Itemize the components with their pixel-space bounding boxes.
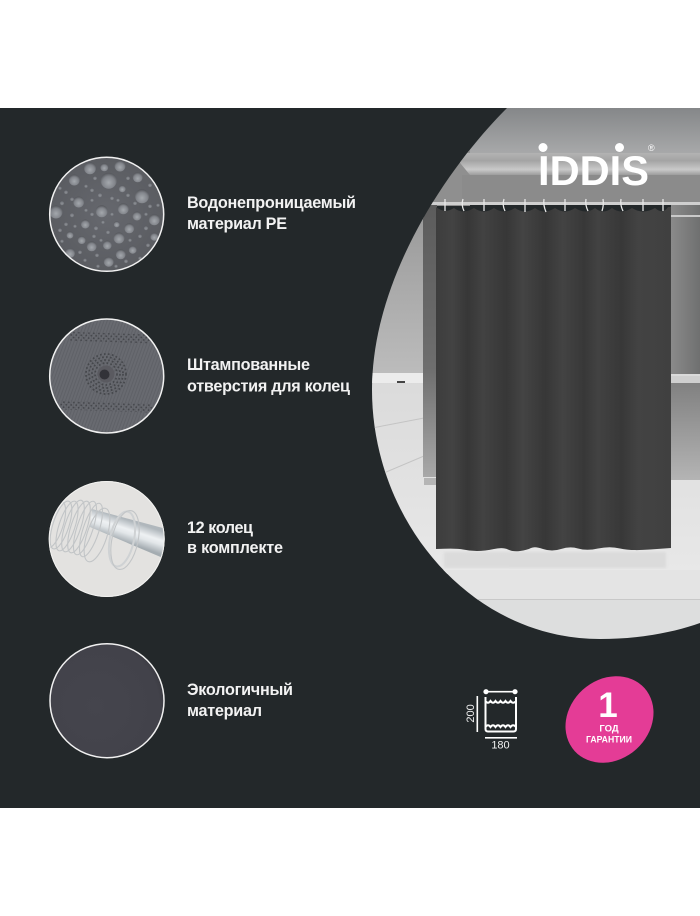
side wall by cornice — [430, 150, 470, 206]
lower tiled wall — [360, 374, 700, 574]
size icon 200 x 180 — [465, 689, 518, 752]
feature 1 label — [187, 194, 356, 233]
right rail — [671, 376, 700, 383]
warranty badge — [548, 658, 671, 781]
droplet circle outline — [50, 157, 164, 271]
rings circle outline — [49, 482, 164, 596]
feature 1: water droplets — [49, 157, 356, 273]
feature 1 label: материал PE — [187, 215, 287, 233]
width line — [485, 737, 517, 739]
height value: 200 — [465, 704, 477, 723]
feature 4 label: материал — [187, 702, 262, 720]
feature 1 label: Водонепроницаемый — [187, 194, 356, 212]
rod with finials — [483, 689, 518, 694]
droplet texture circle — [49, 157, 165, 273]
warranty number: 1 — [598, 686, 618, 725]
dark background panel — [0, 108, 700, 808]
warranty text — [586, 724, 632, 746]
hole circle outline — [50, 319, 164, 433]
bathroom photo with curtain — [360, 108, 700, 645]
right lower wall — [671, 382, 700, 480]
tile joints — [374, 418, 423, 473]
left wall — [372, 217, 424, 374]
floor — [478, 600, 700, 639]
left wainscot rail — [372, 373, 423, 383]
logo: ® — [648, 143, 655, 153]
skirting — [444, 570, 700, 600]
curtain rings — [445, 199, 663, 212]
wall handle — [397, 381, 405, 383]
ceiling — [466, 108, 700, 154]
feature 3 label: 12 колец — [187, 519, 253, 537]
shower rod — [426, 202, 700, 205]
rings on rod photo circle — [48, 481, 165, 597]
width value: 180 — [491, 740, 510, 752]
pink blob — [548, 658, 671, 781]
right wall — [671, 205, 700, 375]
curtain shadow on tiles — [444, 552, 666, 568]
right tub edge — [671, 480, 700, 486]
floor joint — [477, 599, 700, 600]
feature 4 label: Экологичный — [187, 681, 293, 699]
upper back wall — [470, 175, 700, 202]
cornice moulding — [452, 153, 700, 175]
recess beside curtain — [423, 205, 437, 477]
logo: IDDIS — [538, 147, 649, 194]
feature 2 label: отверстия для колец — [187, 378, 350, 396]
feature 2 label: Штампованные — [187, 356, 310, 374]
feature 3 label: в комплекте — [187, 539, 283, 557]
feature 3 label — [187, 519, 283, 557]
tub edge left — [424, 478, 437, 485]
feature 4: eco material — [50, 644, 293, 758]
feature 3: twelve rings — [40, 480, 283, 598]
height line — [476, 696, 478, 732]
rail on right — [671, 215, 700, 217]
curtain outline — [486, 697, 516, 732]
punched hole texture circle — [49, 318, 165, 434]
fabric swatch circle — [50, 644, 164, 758]
feature 2 label — [187, 356, 350, 396]
warranty text: ГОД — [599, 724, 619, 734]
infographic canvas — [0, 108, 700, 808]
warranty text: ГАРАНТИИ — [586, 734, 632, 746]
feature 2: punched ring holes — [49, 318, 350, 434]
feature 4 label — [187, 681, 293, 720]
curtain — [436, 207, 671, 551]
